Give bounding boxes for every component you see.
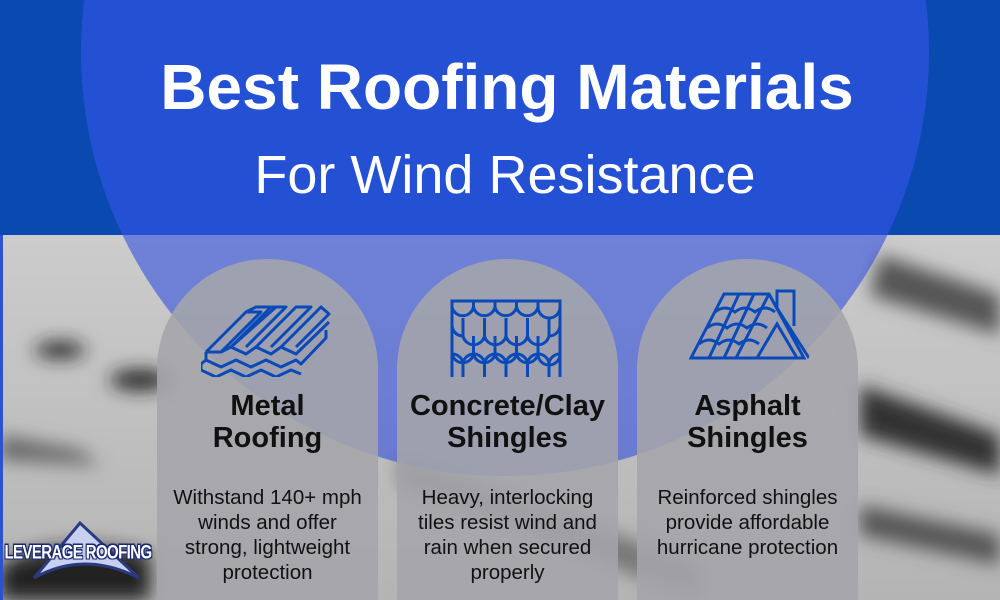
description: Withstand 140+ mph (173, 486, 362, 509)
background photo (0, 235, 1000, 600)
heading: Shingles (447, 422, 568, 454)
title: Best Roofing Materials (160, 51, 854, 123)
description: Reinforced shingles (657, 486, 838, 509)
icon: metal roof panels (201, 305, 331, 377)
heading: Roofing (213, 422, 322, 454)
description (418, 486, 597, 584)
description (657, 486, 838, 559)
description: hurricane protection (657, 536, 838, 559)
card: metal roofing (157, 259, 378, 600)
description: strong, lightweight (185, 536, 350, 559)
heading: Asphalt (694, 390, 801, 422)
description: winds and offer (198, 511, 337, 534)
description: protection (222, 561, 313, 584)
description: rain when secured (424, 536, 591, 559)
logo: leverage roofing: LEVERAGE ROOFING (4, 541, 152, 564)
heading: Metal (230, 390, 305, 422)
description: Heavy, interlocking (422, 486, 593, 509)
description (173, 486, 362, 584)
heading (410, 390, 605, 454)
card: asphalt (637, 259, 858, 600)
card: concrete/clay (397, 259, 618, 600)
big circle (81, 0, 929, 476)
icon: house roof (689, 290, 809, 360)
heading (687, 390, 808, 454)
heading: Shingles (687, 422, 808, 454)
subtitle: For Wind Resistance (254, 145, 756, 205)
logo: leverage roofing (4, 520, 153, 580)
description: provide affordable (666, 511, 829, 534)
top blue band (0, 0, 1000, 235)
heading (213, 390, 322, 454)
description: tiles resist wind and (418, 511, 597, 534)
heading: Concrete/Clay (410, 390, 605, 422)
description: properly (470, 561, 545, 584)
icon: scalloped tiles (450, 300, 562, 377)
